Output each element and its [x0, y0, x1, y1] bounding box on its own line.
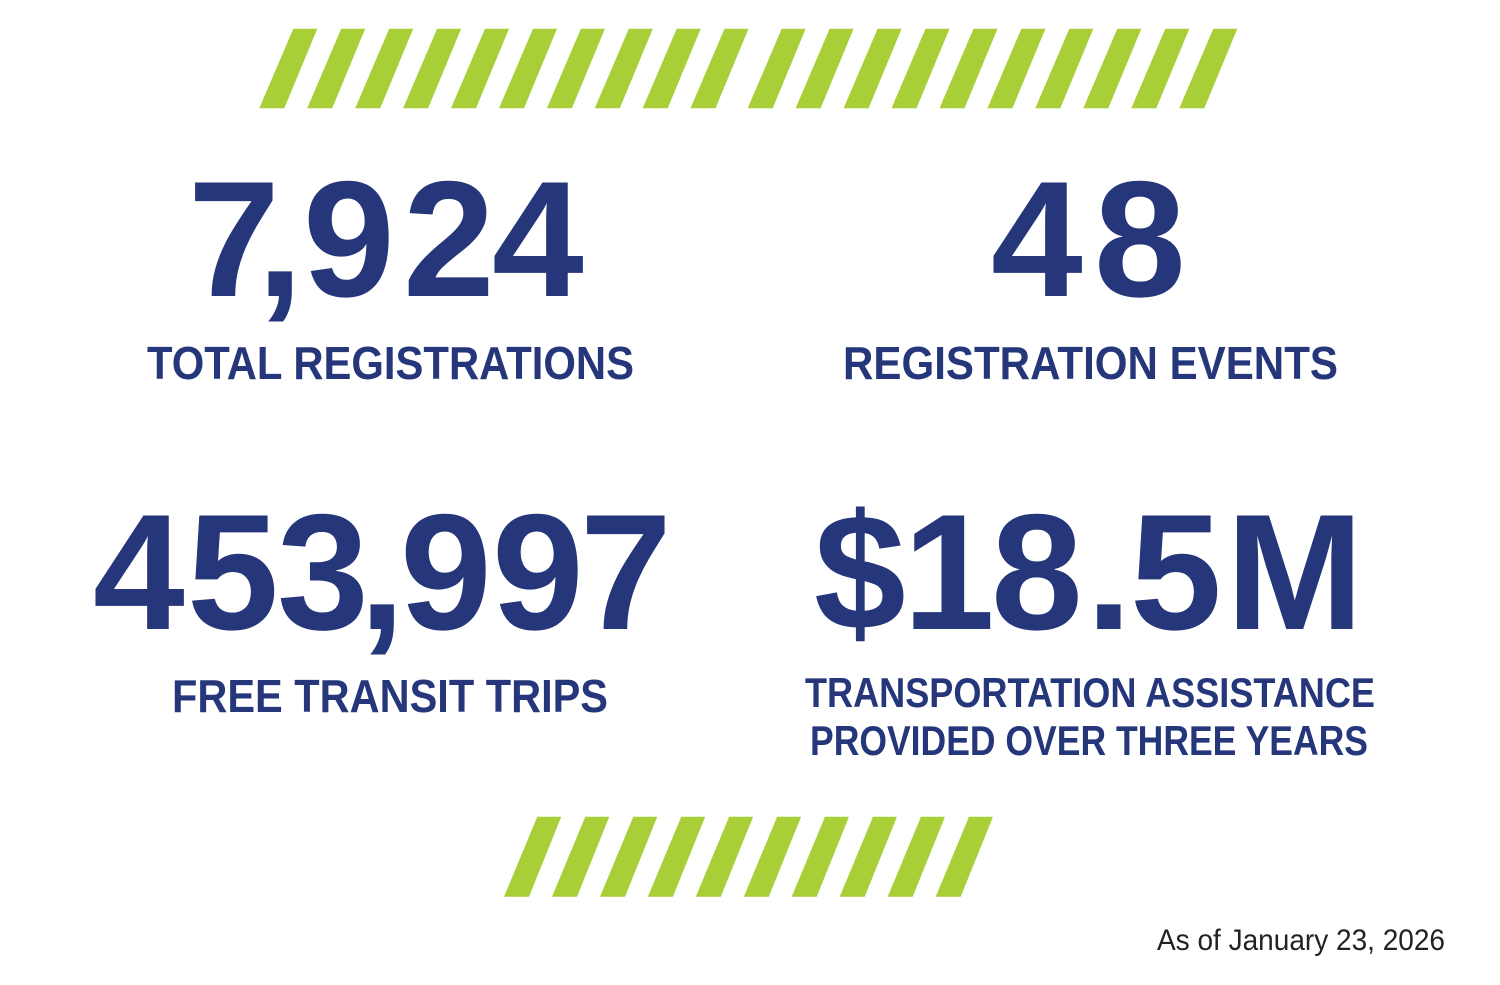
label: registration events: REGISTRATION EVENTS — [843, 337, 1338, 389]
label: transportation assistance provided over three years — [805, 669, 1375, 764]
label: total registrations: TOTAL REGISTRATIONS — [147, 337, 634, 389]
stat: transportation assistance — [805, 480, 1375, 764]
top green stripe band — [259, 29, 1237, 108]
number: 453,997: 453,997 — [93, 480, 672, 664]
label: transportation assistance provided over three years: PROVIDED OVER THREE YEARS — [810, 717, 1368, 764]
bottom green stripe band — [504, 817, 993, 897]
stat: free transit trips — [93, 480, 672, 722]
stat: registration events — [843, 147, 1338, 389]
label: free transit trips: FREE TRANSIT TRIPS — [172, 670, 608, 722]
number: $18.5M: $18.5M — [814, 480, 1363, 664]
date note: As of January 23, 2026 — [1157, 924, 1445, 957]
stat: total registrations — [147, 147, 634, 389]
number: 48: 48 — [991, 147, 1186, 331]
label: transportation assistance provided over three years: TRANSPORTATION ASSISTANCE — [805, 669, 1375, 716]
number: 7,924: 7,924 — [188, 147, 584, 331]
